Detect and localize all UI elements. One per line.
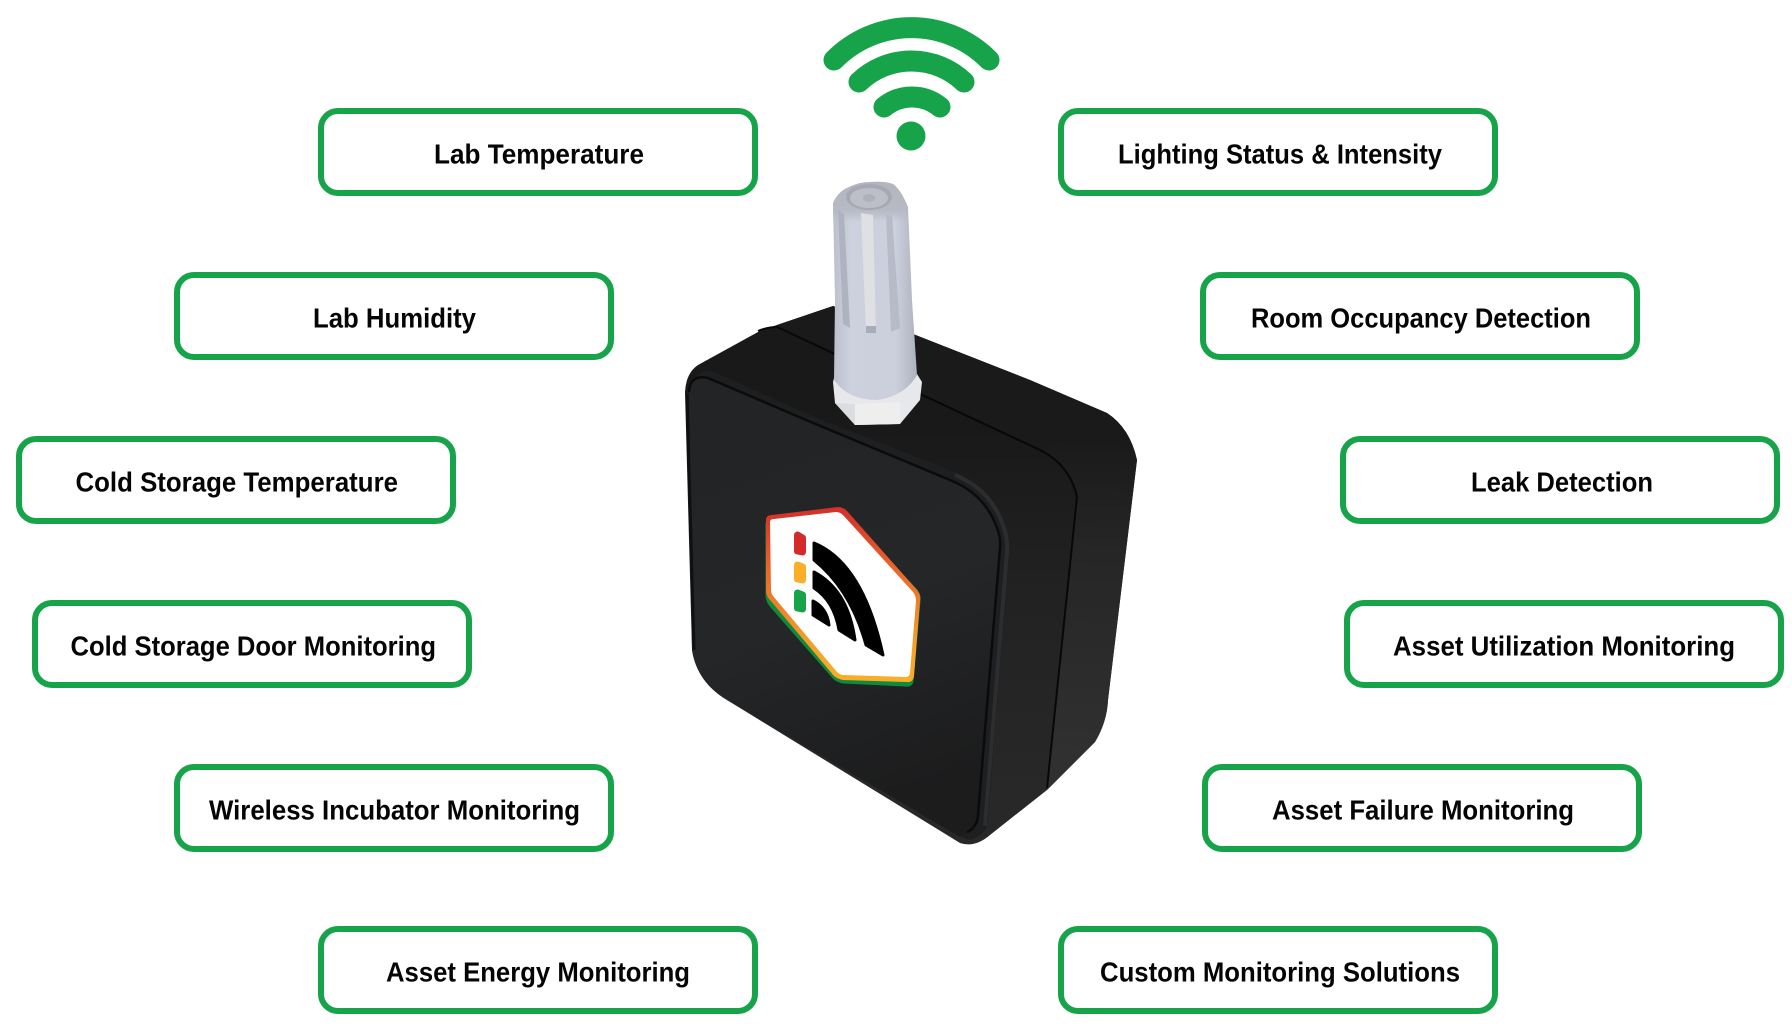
label: Wireless Incubator Monitoring: Wireless Incubator Monitoring [209,794,580,826]
label: Lighting Status & Intensity: Lighting Status & Intensity [1118,138,1442,170]
label: Cold Storage Temperature [19,439,453,521]
label: Lab Temperature: Lab Temperature [434,138,644,170]
device front face [689,377,1000,837]
label: Cold Storage Temperature: Cold Storage Temperature [76,466,398,498]
device rear section [1040,413,1137,790]
label: Asset Failure Monitoring: Asset Failure Monitoring [1272,794,1574,826]
label: Asset Utilization Monitoring: Asset Utilization Monitoring [1393,630,1735,662]
icon: wifi signal [834,28,989,151]
logo on device [766,507,920,686]
probe body [833,182,917,400]
label: Asset Energy Monitoring: Asset Energy Monitoring [386,956,690,988]
label: Custom Monitoring Solutions [1061,929,1495,1011]
label: Lab Temperature [321,111,755,193]
sensor probe [833,182,922,425]
probe slots [838,210,900,333]
label: Lab Humidity [177,275,611,357]
label: Wireless Incubator Monitoring [177,767,611,849]
label: Lighting Status & Intensity [1061,111,1495,193]
label: Custom Monitoring Solutions: Custom Monitoring Solutions [1100,956,1460,988]
label: Cold Storage Door Monitoring: Cold Storage Door Monitoring [70,630,436,662]
device face band [692,371,1009,840]
logo traffic lights [798,535,802,609]
device: black sensor enclosure [685,306,1137,844]
label: Leak Detection: Leak Detection [1471,466,1653,498]
label: Asset Utilization Monitoring [1347,603,1781,685]
label: Lab Humidity: Lab Humidity [313,302,476,334]
device seams [687,327,1077,832]
label: Leak Detection [1343,439,1777,521]
label: Cold Storage Door Monitoring [35,603,469,685]
label: Room Occupancy Detection: Room Occupancy Detection [1251,302,1591,334]
probe cap shoulder [833,182,908,222]
label: Asset Energy Monitoring [321,929,755,1011]
logo signal arcs [813,543,883,655]
probe hex nut [833,374,922,425]
label: Room Occupancy Detection [1203,275,1637,357]
label: Asset Failure Monitoring [1205,767,1639,849]
probe cap [846,184,892,210]
